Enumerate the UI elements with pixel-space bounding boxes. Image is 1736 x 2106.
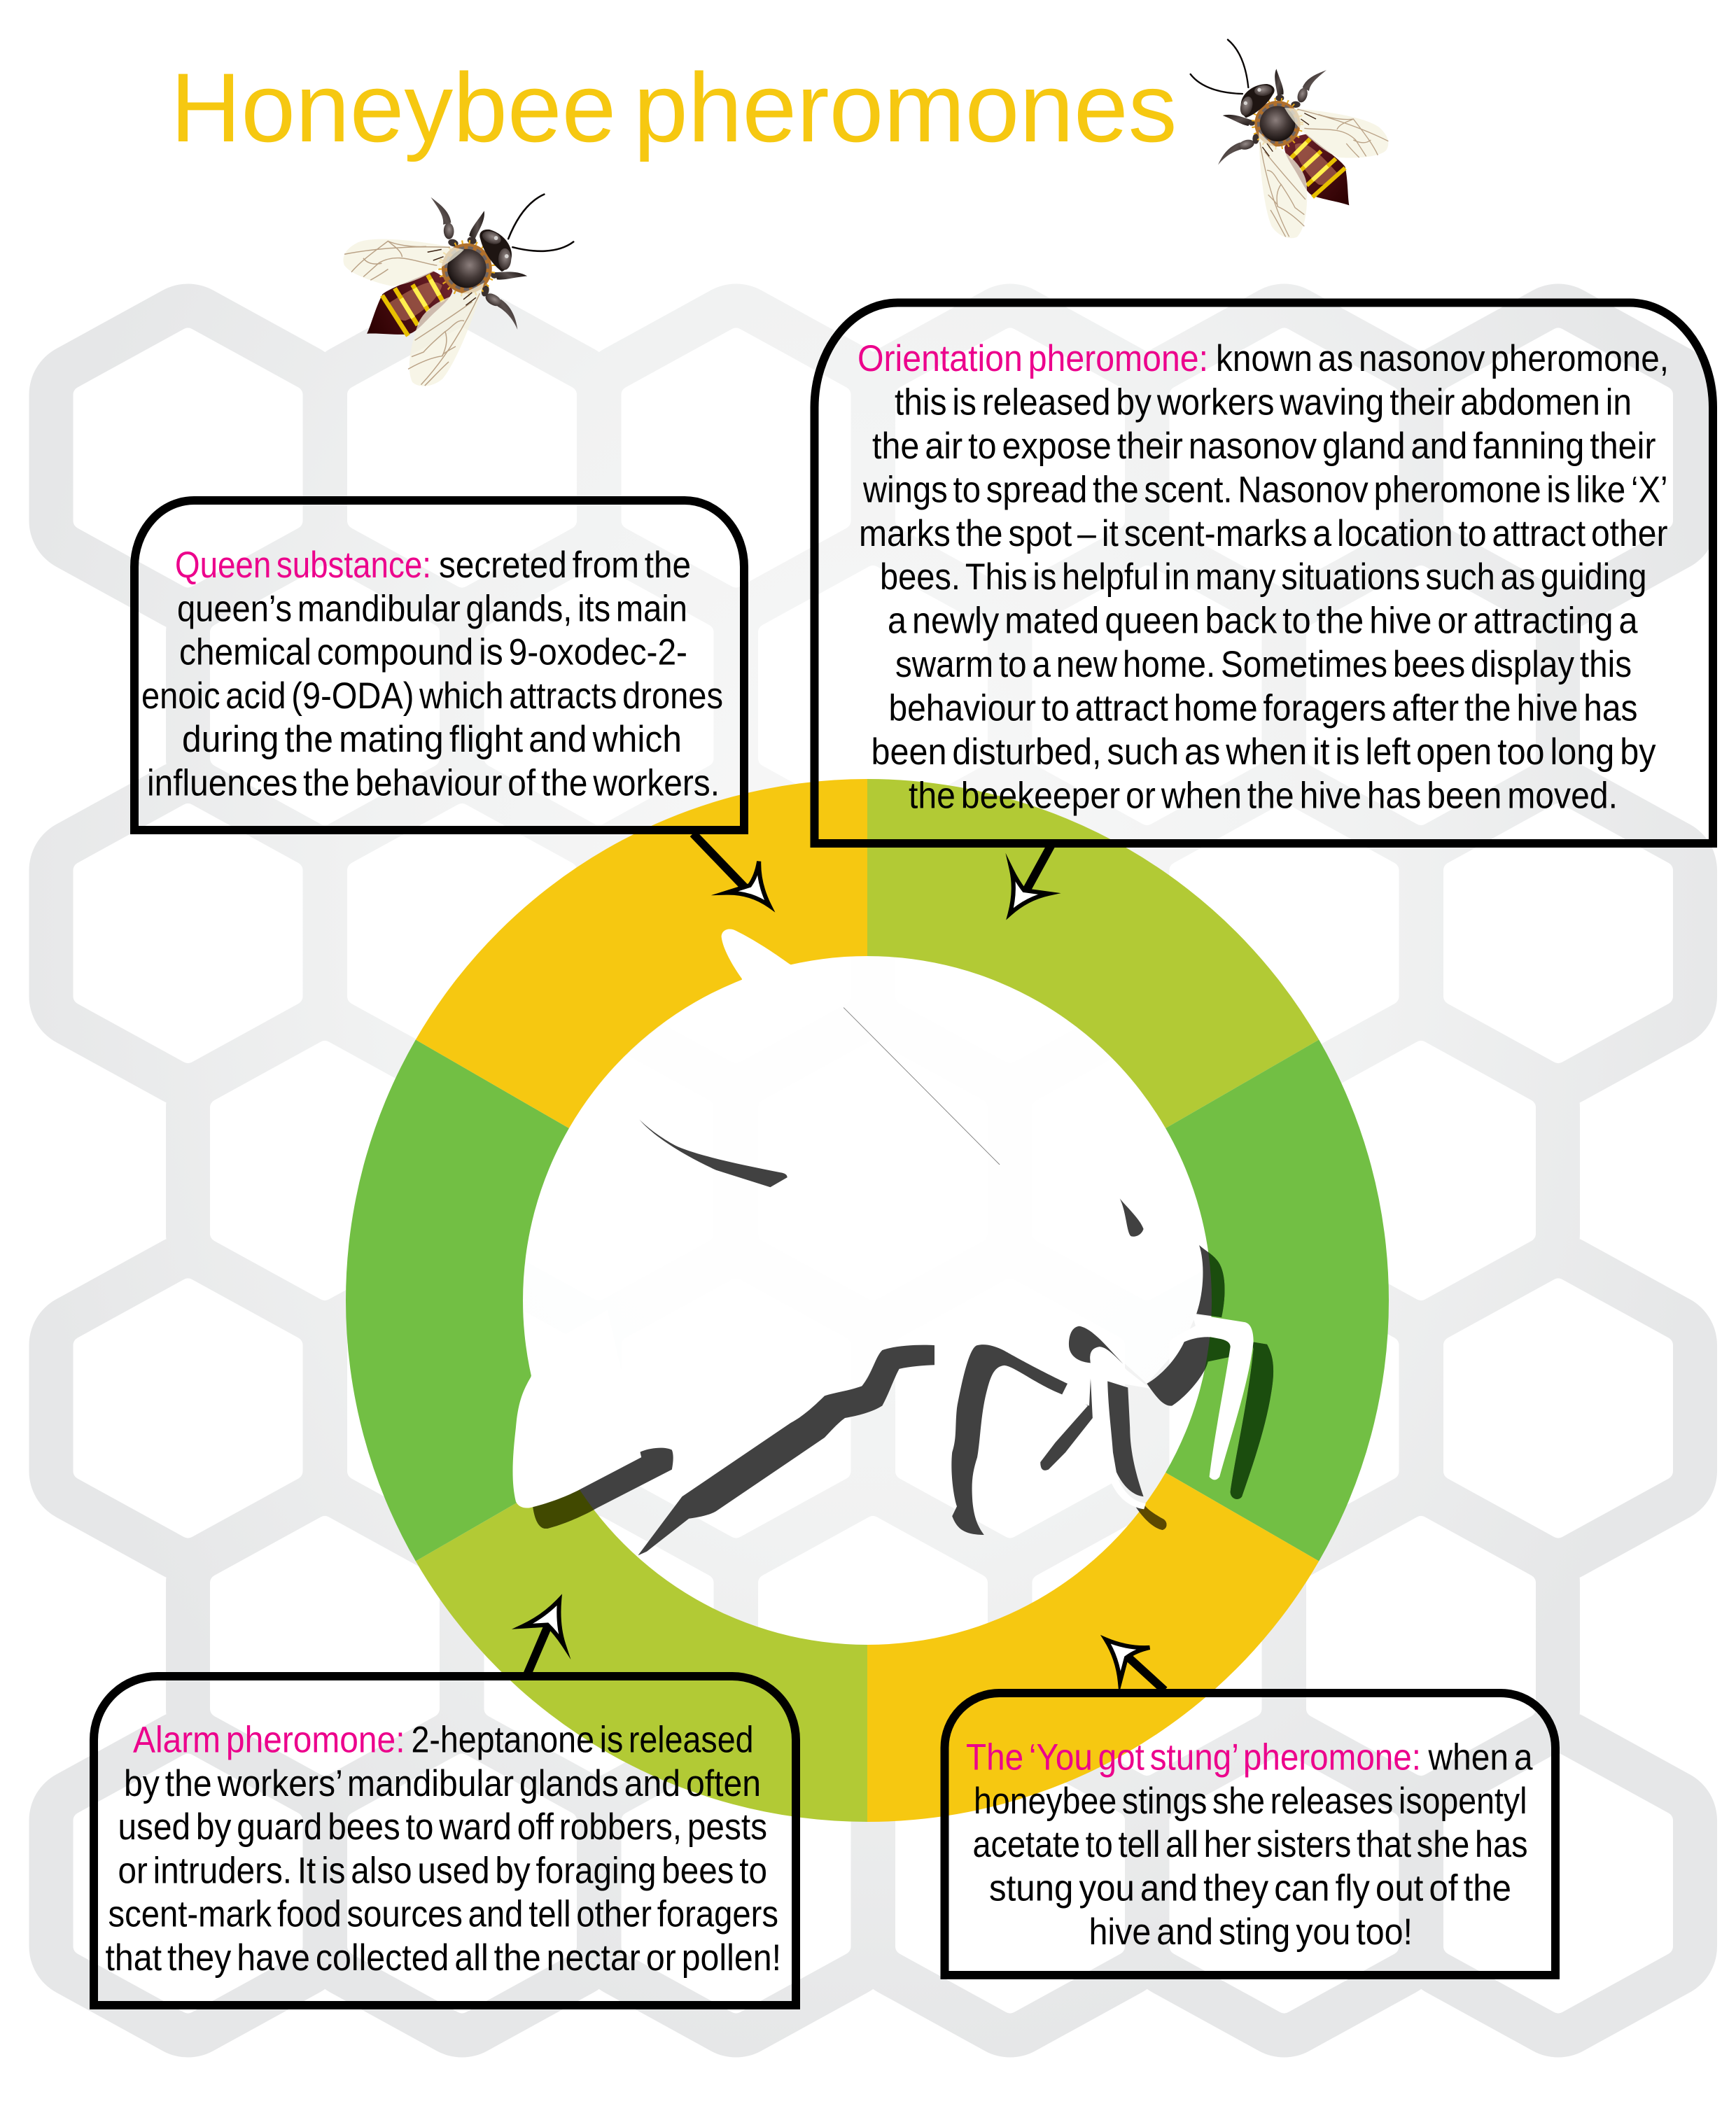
panel: alarm pheromone: 2-heptanone is released (412, 1719, 753, 1761)
panel: queen substance: Queen substance: (175, 545, 431, 586)
panel: alarm pheromone: by the workers’ mandibular glands and often (124, 1763, 761, 1804)
ring segment: you got stung (867, 1473, 1319, 1822)
panel: queen substance: queen’s mandibular glands, its main (177, 588, 687, 630)
panel: orientation pheromone: a newly mated queen back to the hive or attracting a (888, 601, 1638, 641)
ring segment: alarm (416, 1473, 867, 1822)
panel: you got stung pheromone: The ‘You got stung’ pheromone: (966, 1737, 1421, 1778)
panel: alarm pheromone: scent-mark food sources and tell other foragers (108, 1894, 778, 1935)
panel: alarm pheromone (94, 1676, 796, 2005)
panel: orientation pheromone: known as nasonov pheromone, (1216, 338, 1669, 379)
panel: orientation pheromone: been disturbed, such as when it is left open too long by (871, 731, 1656, 773)
panel: orientation pheromone: swarm to a new home. Sometimes bees display this (895, 644, 1632, 685)
pheromone ring (346, 779, 1389, 1822)
panel: orientation pheromone: marks the spot – it scent-marks a location to attract other (859, 513, 1667, 554)
panel: you got stung pheromone: stung you and they can fly out of the (989, 1867, 1511, 1909)
panel: alarm pheromone: that they have collected all the nectar or pollen! (105, 1937, 781, 1979)
icon: honeybee top right (1191, 40, 1388, 238)
icon: honeybee top left (316, 147, 584, 415)
panel: orientation pheromone: bees. This is helpful in many situations such as guiding (880, 556, 1646, 598)
panel: alarm pheromone: or intruders. It is also used by foraging bees to (118, 1851, 767, 1891)
arrow: orientation pheromone (1010, 843, 1052, 913)
bee silhouette shadows (533, 1119, 1273, 1555)
panel: queen substance: influences the behaviour of the workers. (147, 763, 720, 803)
panel: you got stung pheromone: honeybee stings she releases isopentyl (974, 1781, 1527, 1822)
panel: orientation pheromone: the air to expose their nasonov gland and fanning their (872, 426, 1656, 467)
ring segment: left (346, 1040, 569, 1561)
panel: you got stung pheromone (945, 1693, 1555, 1975)
panel: alarm pheromone: Alarm pheromone: (133, 1719, 405, 1761)
panel: queen substance: enoic acid (9-ODA) which attracts drones (141, 675, 723, 717)
panel: queen substance (134, 500, 744, 830)
panel: queen substance: chemical compound is 9-oxodec-2- (179, 631, 687, 673)
background: honeycomb pattern (81, 336, 1665, 2005)
panel: orientation pheromone: behaviour to attract home foragers after the hive has (889, 687, 1638, 729)
ring segment: orientation (867, 779, 1319, 1128)
arrow: alarm pheromone (523, 1600, 564, 1676)
arrow: you got stung pheromone (1106, 1640, 1165, 1690)
bee silhouette body (514, 957, 1212, 1508)
ring segment: queen substance (416, 779, 867, 1128)
panel: orientation pheromone (815, 302, 1713, 843)
panel: you got stung pheromone: when a (1428, 1737, 1533, 1778)
ring segment: right (1166, 1040, 1389, 1561)
panel: orientation pheromone: Orientation pheromone: (858, 338, 1208, 379)
panel: you got stung pheromone: hive and sting you too! (1089, 1911, 1413, 1953)
panel: you got stung pheromone: acetate to tell all her sisters that she has (973, 1824, 1527, 1865)
title: Honeybee pheromones (171, 52, 1177, 162)
panel: orientation pheromone: the beekeeper or when the hive has been moved. (909, 775, 1618, 816)
bee silhouette highlights (512, 929, 1254, 1508)
panel: alarm pheromone: used by guard bees to ward off robbers, pests (118, 1806, 767, 1848)
arrow: queen substance (693, 834, 769, 906)
panel: orientation pheromone: this is released by workers waving their abdomen in (895, 382, 1632, 423)
panel: queen substance: during the mating flight and which (182, 719, 682, 760)
panel: queen substance: secreted from the (439, 545, 691, 586)
